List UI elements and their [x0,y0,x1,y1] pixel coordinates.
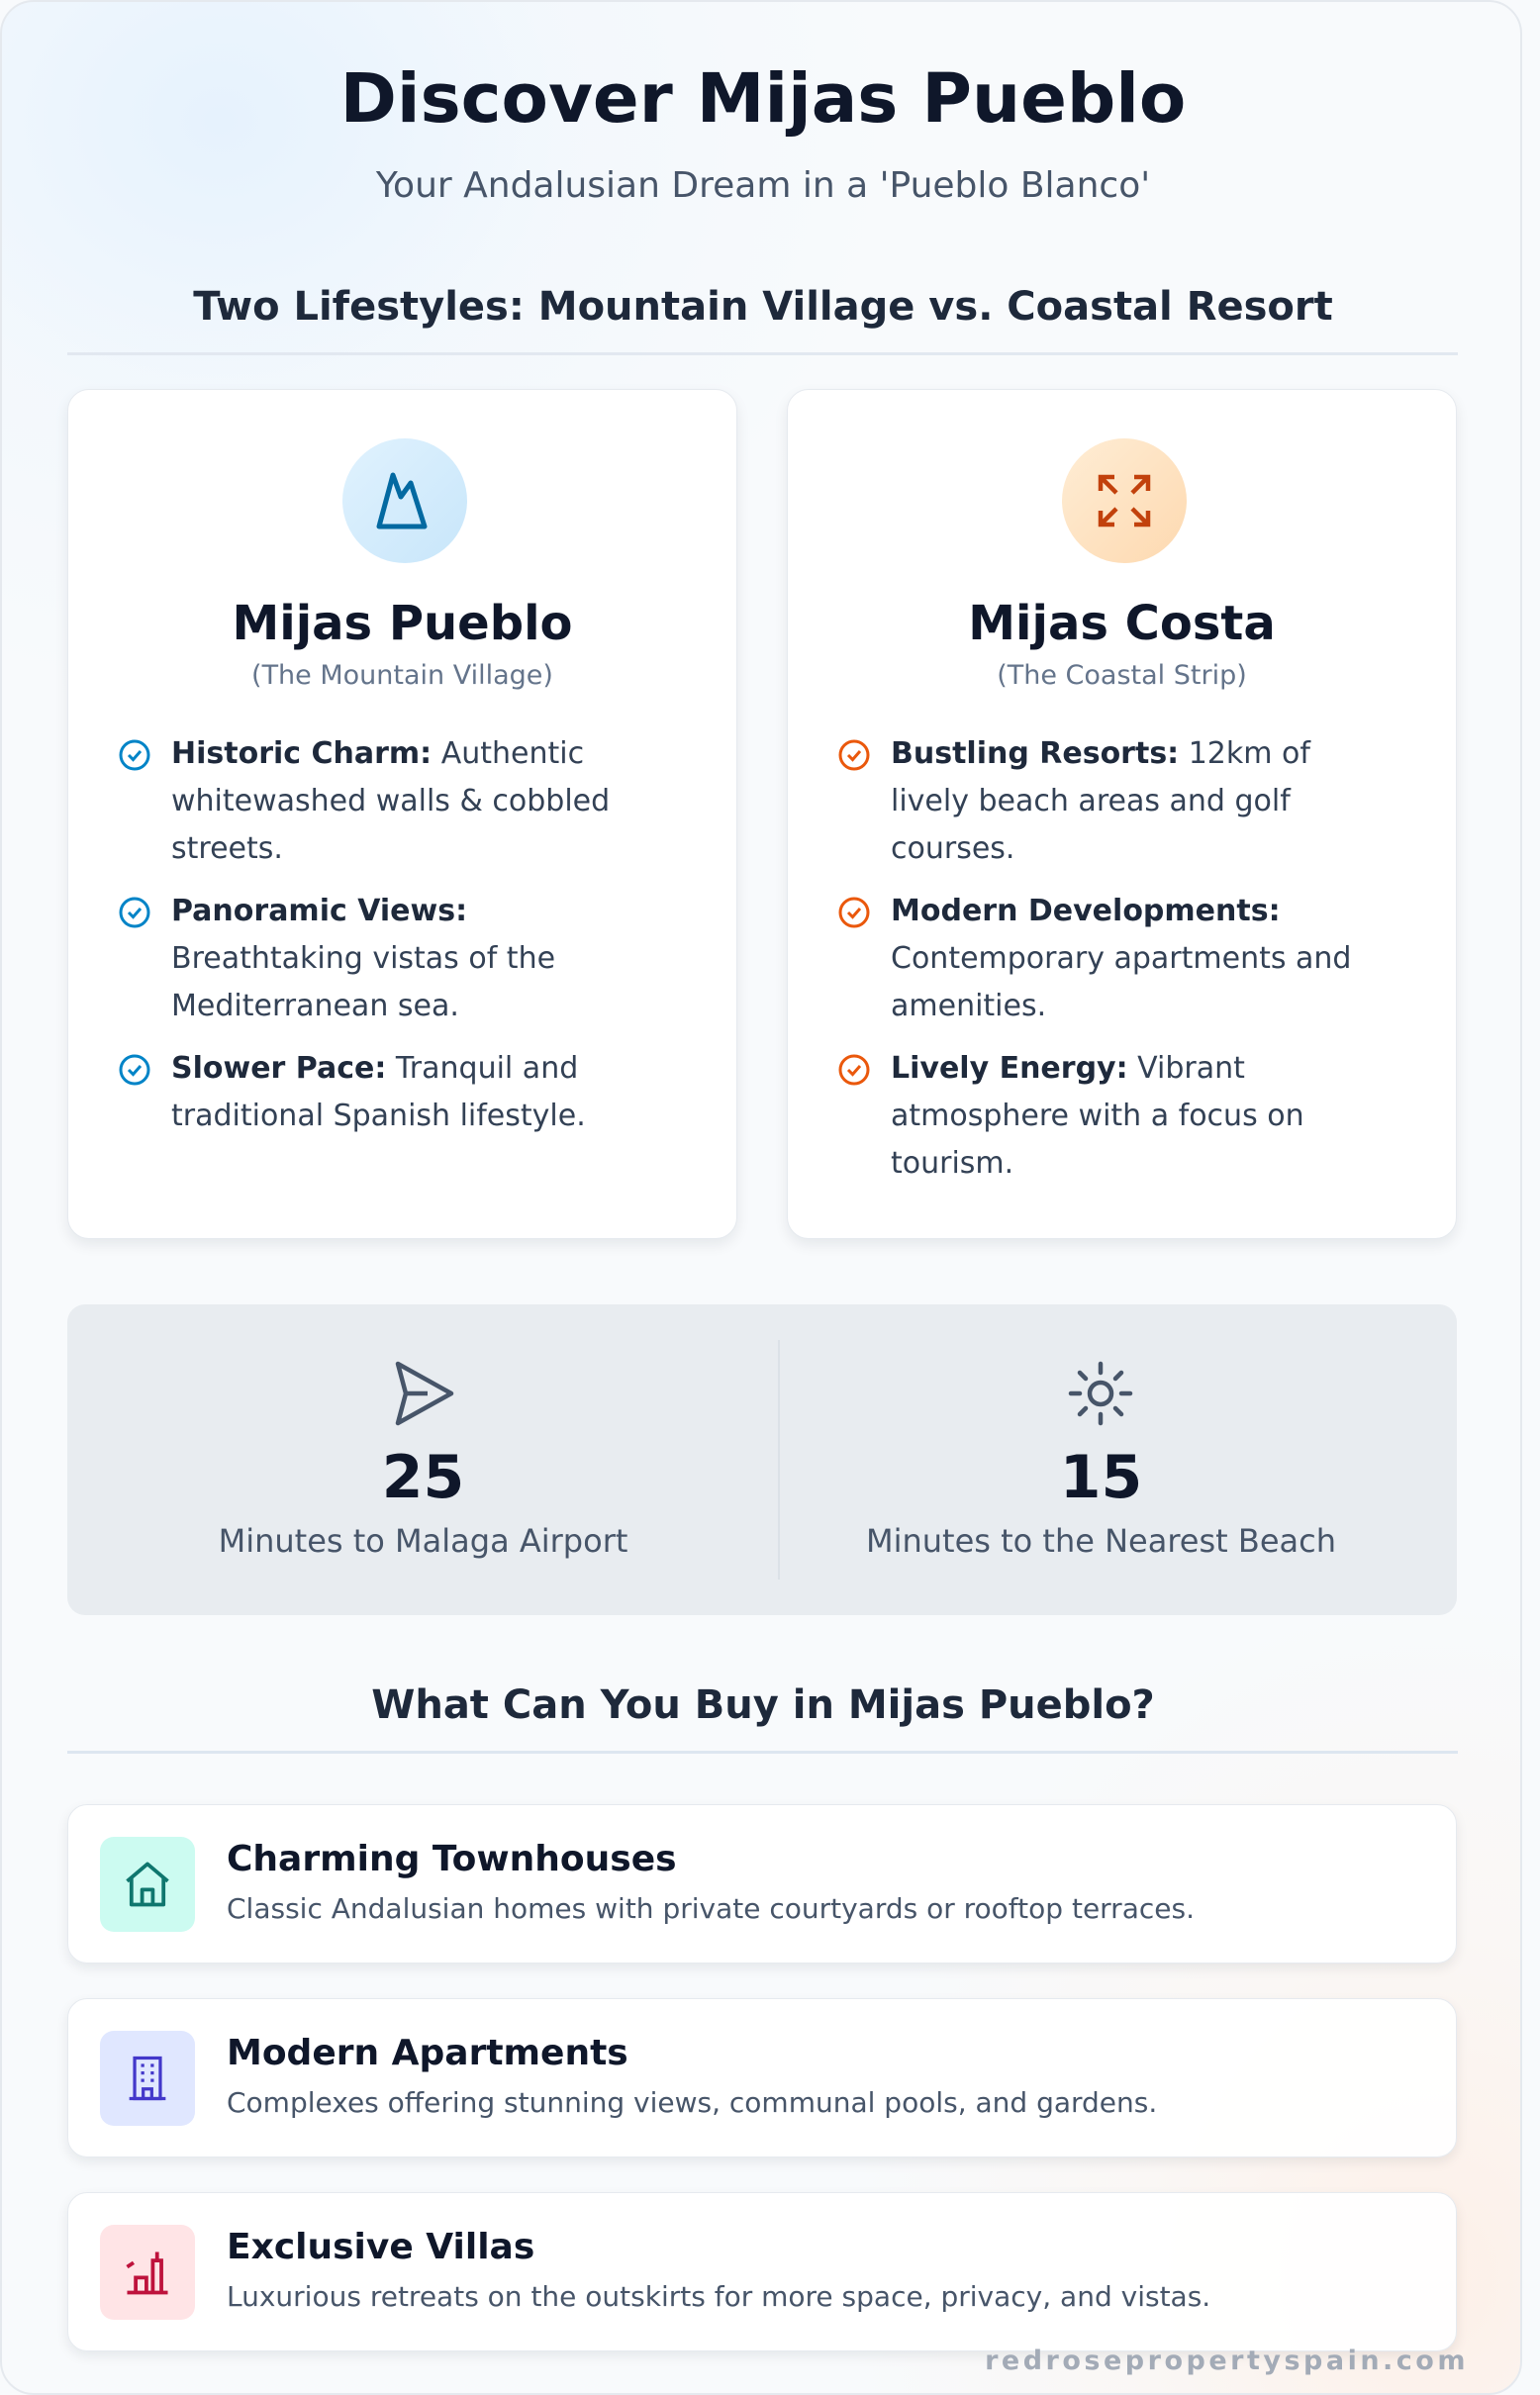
icon: mountain [342,438,467,563]
panel: Mijas Pueblo [67,389,737,1239]
item: apartments [67,1998,1457,2157]
icon: house [100,1837,195,1932]
item: townhouses: Classic Andalusian homes with private courtyards or rooftop terraces. [227,1892,1195,1925]
heading: Mijas Pueblo [232,596,573,651]
stat: airport: Minutes to Malaga Airport [219,1522,627,1560]
list: costa features: Bustling Resorts: 12km of [891,736,1310,771]
stat: beach: Minutes to the Nearest Beach [866,1522,1336,1560]
list: pueblo features: Historic Charm: Authentic whitewashed walls & cobbled streets. [171,736,610,866]
section heading: two lifestyles: Two Lifestyles: Mountain Village vs. Coastal Resort [193,284,1333,330]
item: villas: Luxurious retreats on the outskirts for more space, privacy, and vistas. [227,2280,1210,2313]
subheading: (The Coastal Strip) [997,660,1247,691]
stat: beach: 15 [1060,1443,1142,1512]
heading: Mijas Costa [968,596,1276,651]
watermark: redrosepropertyspain.com [985,2346,1469,2376]
stat: airport: 25 [382,1443,464,1512]
title: Discover Mijas Pueblo [340,59,1186,139]
list: pueblo features: Breathtaking vistas of the Mediterranean sea. [171,941,555,1023]
item: villas: Exclusive Villas [227,2227,534,2267]
list: pueblo features [119,736,610,1133]
list: costa features: Modern Developments: Contemporary apartments and amenities. [891,894,1351,1023]
item: apartments: Modern Apartments [227,2033,628,2073]
panel: Mijas Costa [787,389,1457,1239]
item: apartments: Complexes offering stunning views, communal pools, and gardens. [227,2086,1157,2119]
icon: paper plane [396,1362,453,1425]
stat: beach [866,1362,1336,1560]
subtitle: Your Andalusian Dream in a 'Pueblo Blanco' [376,165,1150,206]
subheading: (The Mountain Village) [251,660,553,691]
item: villas [67,2192,1457,2351]
icon: expand arrows [1062,438,1187,563]
list: costa features: lively beach areas and golf courses. [891,784,1291,866]
list: costa features: Lively Energy: Vibrant atmosphere with a focus on tourism. [891,1051,1304,1181]
list: pueblo features: Slower Pace: Tranquil and traditional Spanish lifestyle. [171,1051,586,1133]
list: costa features [839,736,1351,1181]
stat: airport [219,1362,627,1560]
item: townhouses: Charming Townhouses [227,1839,677,1879]
icon: sun [1069,1362,1132,1425]
section heading: what can you buy: What Can You Buy in Mijas Pueblo? [371,1682,1155,1728]
item: townhouses [67,1804,1457,1964]
icon: villa [100,2225,195,2320]
icon: building [100,2031,195,2126]
list: pueblo features: Panoramic Views: [171,894,467,928]
panel: stats [67,1304,1457,1615]
